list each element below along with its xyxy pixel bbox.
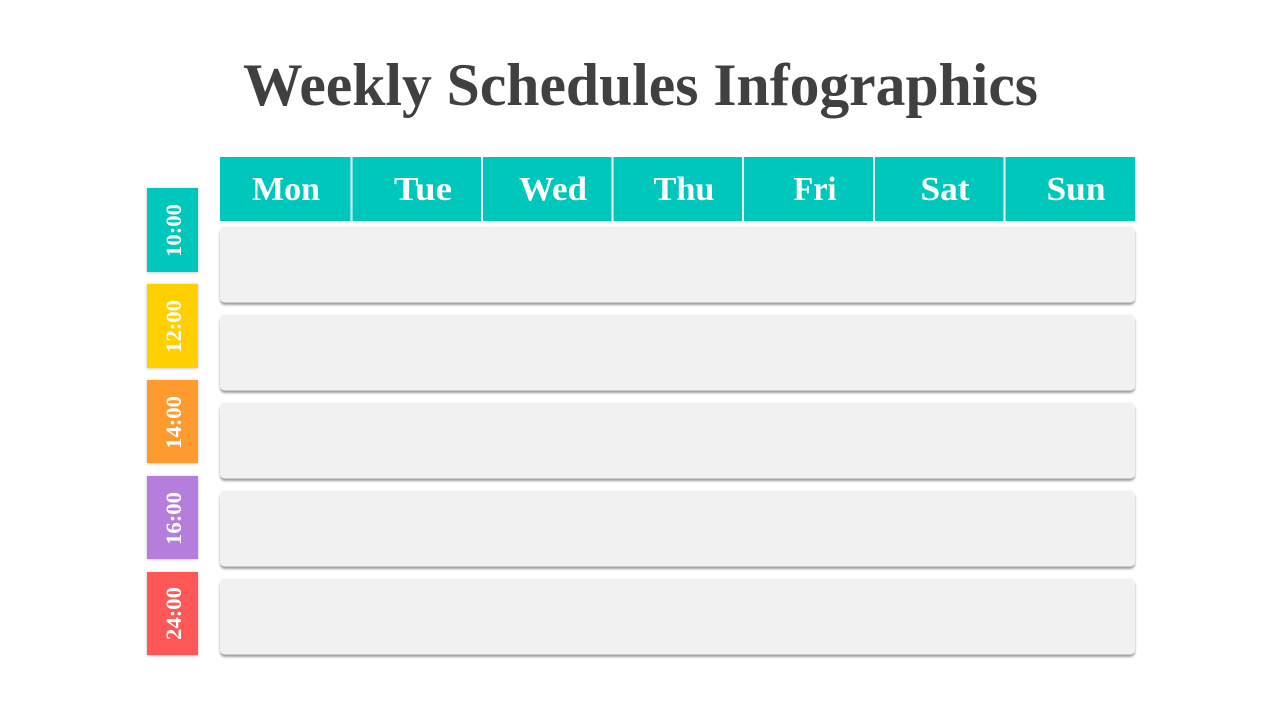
time tab: 14:00: 14:00 [161, 396, 186, 449]
header: days of the week [220, 157, 1135, 221]
time tab: 24:00 [147, 572, 198, 655]
time tab: 12:00 [147, 284, 198, 368]
time tab: 10:00: 10:00 [161, 204, 186, 257]
schedule row: 12:00 [220, 314, 1135, 390]
header: days of the week: Sun [1046, 171, 1106, 208]
schedule row: 16:00 [220, 490, 1135, 566]
header: days of the week: Sat [920, 171, 970, 208]
time tab: 16:00 [147, 476, 198, 559]
header: days of the week: Wed [519, 171, 587, 208]
time tab: 16:00: 16:00 [161, 492, 186, 545]
time tab: 12:00: 12:00 [161, 300, 186, 353]
time tab: 14:00 [147, 380, 198, 463]
schedule row: 10:00 [220, 226, 1135, 302]
header: days of the week: Tue [394, 171, 452, 208]
time tab: 10:00 [147, 188, 198, 272]
header: days of the week: Mon [252, 171, 320, 208]
header: days of the week: Thu [654, 171, 714, 208]
schedule row: 14:00 [220, 402, 1135, 478]
time tab: 24:00: 24:00 [161, 587, 186, 640]
header: days of the week: Fri [794, 171, 836, 208]
title: Weekly Schedules Infographics [243, 52, 1038, 118]
schedule row: 24:00 [220, 578, 1135, 654]
